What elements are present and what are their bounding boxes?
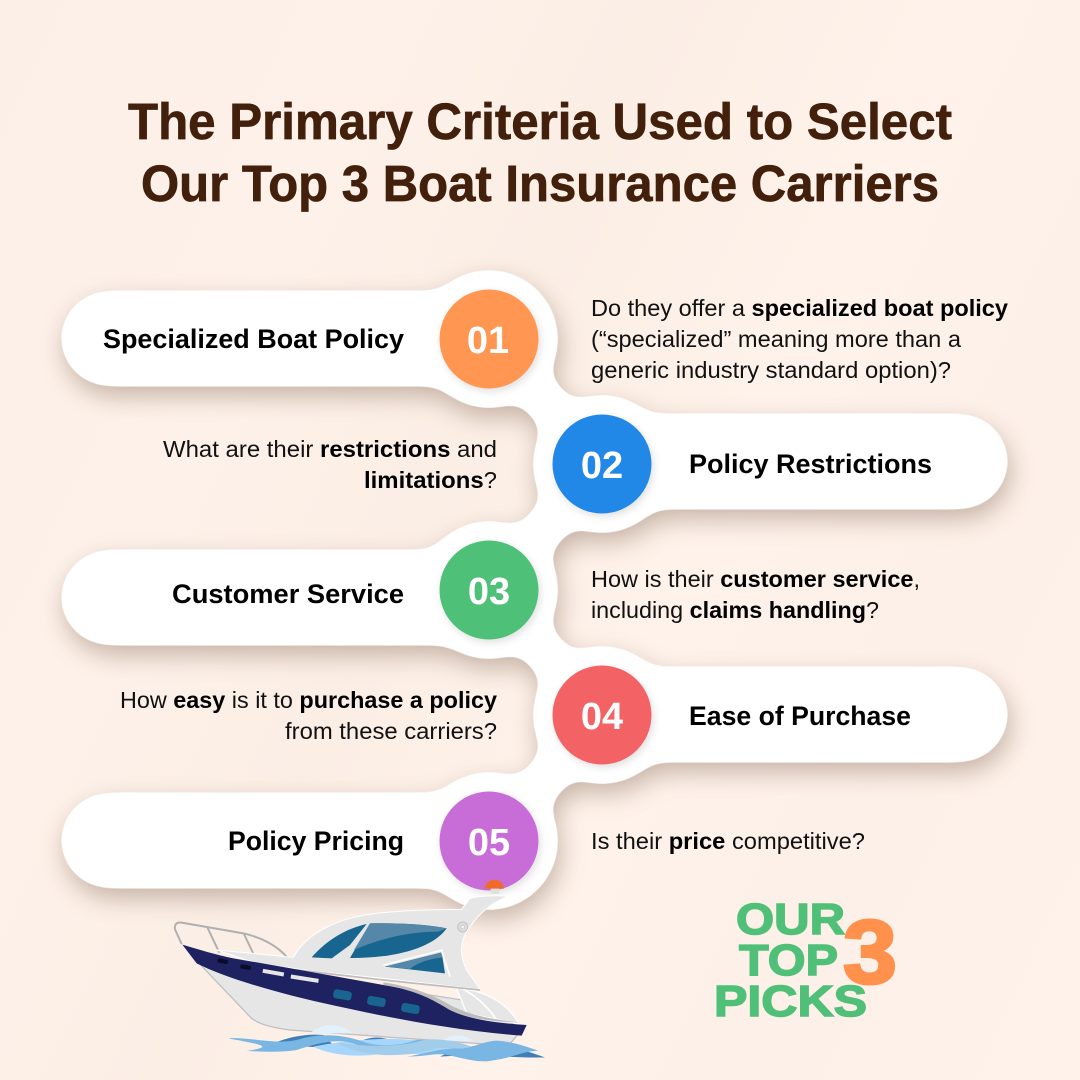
logo: our top 3 picks: TOP [739,936,838,985]
description 4 [120,687,497,744]
logo: our top 3 picks [714,895,897,1026]
description 3 [591,566,920,623]
title [128,93,952,212]
description 4: from these carriers? [285,718,497,744]
label: specialized boat policy: Specialized Boat Policy [103,324,404,354]
number badge 01 [440,290,538,388]
label: ease of purchase: Ease of Purchase [689,701,911,731]
description 4: How easy is it to purchase a policy [120,687,497,713]
number badge 04 [552,666,652,764]
description 1: (“specialized” meaning more than a [591,326,961,352]
number badge 02: 02 [581,445,623,487]
title: The Primary Criteria Used to Select [128,93,952,150]
label: policy pricing: Policy Pricing [228,826,404,856]
row 1: specialized boat policy [103,290,1008,388]
row 3: customer service [172,540,920,640]
number badge 03 [440,540,538,640]
description 2: What are their restrictions and [163,436,497,462]
description 3: How is their customer service, [591,566,920,592]
description 5: Is their price competitive? [591,828,865,854]
label: customer service: Customer Service [172,579,404,609]
description 1: Do they offer a specialized boat policy [591,295,1008,321]
logo: our top 3 picks: OUR [736,895,845,944]
row 5: policy pricing [228,792,865,890]
number badge 01: 01 [467,320,509,362]
number badge 05: 05 [468,822,510,864]
white connected pill and circle panel [61,270,1008,910]
number badge 02 [552,414,652,514]
row 2: policy restrictions [163,414,932,514]
logo: our top 3 picks: PICKS [714,977,867,1026]
number badge 04: 04 [581,696,623,738]
logo: our top 3 picks: 3 [843,903,897,1003]
number badge 03: 03 [468,571,510,613]
icon: motor boat on waves [175,880,545,1061]
title: Our Top 3 Boat Insurance Carriers [141,155,939,212]
description 1: generic industry standard option)? [591,357,951,383]
description 3: including claims handling? [591,597,879,623]
number badge 05 [440,792,538,890]
description 2 [163,436,497,493]
description 1 [591,295,1008,383]
description 2: limitations? [364,467,497,493]
row 4: ease of purchase [120,666,911,764]
label: policy restrictions: Policy Restrictions [689,449,932,479]
